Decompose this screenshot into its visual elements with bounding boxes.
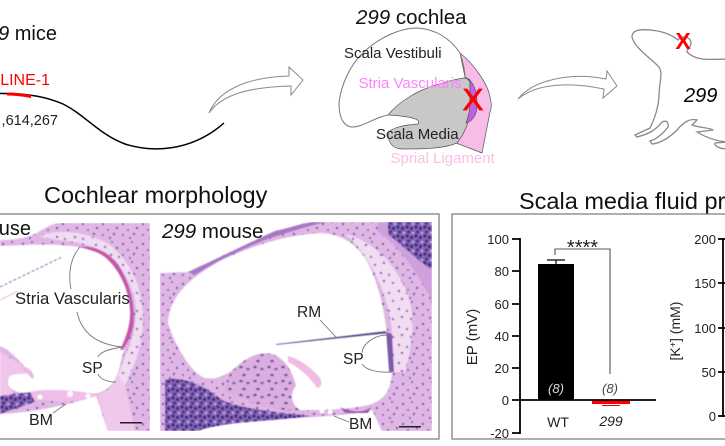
label: Stria Vascularis: Stria Vascularis (358, 75, 462, 92)
label: Scala Media: Scala Media (376, 126, 459, 143)
pale ligament band (345, 234, 412, 372)
label: SP: SP (82, 360, 103, 377)
Reissner's membrane (276, 331, 386, 345)
tissue (0, 223, 150, 431)
top bony wall edge (188, 222, 326, 275)
mouse outline (632, 28, 725, 149)
label: Stria Vascularis: Stria Vascularis (15, 289, 130, 308)
significance stars: **** (567, 237, 598, 259)
stria remnant (386, 332, 394, 372)
bar chart: K+ (667, 232, 725, 424)
y tick labels (694, 232, 716, 424)
label: LINE-1: LINE-1 (0, 72, 50, 89)
y tick labels: 0 (709, 409, 716, 424)
Reissner's membrane (0, 257, 62, 287)
scala vestibuli outline (339, 28, 465, 127)
dark marrow bottom left (165, 379, 310, 431)
red X on ear: X (675, 28, 691, 54)
bar chart: EP: 299 (598, 413, 623, 429)
tissue (160, 222, 432, 431)
heading: cochlear morphology: Cochlear morphology (44, 182, 268, 208)
y tick labels: 150 (694, 276, 716, 291)
WT bar (538, 264, 574, 400)
label: BM: BM (349, 416, 372, 433)
outer bone band (378, 222, 432, 300)
heading: 299 cochlea: 299 cochlea (355, 6, 467, 29)
basilar membrane (30, 390, 97, 402)
stria vascularis (466, 78, 477, 123)
y tick labels: 200 (694, 232, 716, 247)
y axis (718, 238, 725, 417)
y tick labels: 100 (487, 232, 509, 247)
y axis (512, 238, 520, 434)
y tick labels: 0 (502, 393, 509, 408)
genomic position: ,614,267 (2, 113, 58, 129)
y tick labels: 50 (702, 365, 716, 380)
y axis title: EP (mV) (464, 309, 481, 365)
y axis title: [K (667, 347, 683, 360)
label: Spiral Ligament: Sprial Ligament (390, 150, 496, 167)
y tick labels: -20 (490, 426, 509, 441)
significance bracket (555, 249, 610, 374)
y tick labels: 60 (495, 297, 509, 312)
leader lines (320, 320, 392, 422)
spiral ligament (456, 53, 491, 153)
LINE-1 segment (7, 94, 31, 96)
histology: wild-type mouse (0, 218, 150, 431)
y axis title: + (668, 342, 678, 347)
cochlea diagram (339, 28, 496, 167)
panel: cochlear morphology (0, 214, 439, 439)
y axis title: ] (mM) (667, 302, 683, 342)
y tick labels: 20 (495, 361, 509, 376)
limbus (0, 352, 32, 396)
y tick labels (487, 232, 509, 441)
scale bar (120, 422, 142, 424)
label: SP: SP (343, 351, 364, 368)
y tick labels: 100 (694, 321, 716, 336)
dark marrow top right (388, 222, 432, 270)
bar chart: EP: (8) (602, 381, 618, 396)
y tick labels: 40 (495, 329, 509, 344)
stria vascularis tissue (78, 247, 134, 350)
tectorial tip (20, 366, 34, 379)
leader lines (53, 247, 123, 413)
red X on stria: X (463, 82, 484, 117)
label: BM: BM (29, 412, 53, 429)
gene diagram: LINE-1 insertion (0, 72, 224, 149)
tectorial membrane (288, 356, 321, 388)
bar chart: EP (464, 232, 656, 441)
n labels: (8) (548, 381, 564, 396)
scale bar (399, 426, 421, 428)
299 bar (592, 400, 630, 404)
299 error bar (602, 404, 620, 406)
basilar membrane (340, 406, 372, 413)
lumen (0, 245, 132, 394)
arrow: cochlea to mouse (518, 71, 617, 99)
lumen (168, 233, 392, 410)
y tick labels: 80 (495, 264, 509, 279)
label: Scala Vestibuli: Scala Vestibuli (344, 45, 442, 62)
label: 299: 299 (683, 85, 717, 107)
WT error bar (547, 260, 565, 264)
heading: scala media fluid properties: Scala media fluid pr (519, 188, 725, 214)
genome curve (0, 93, 224, 149)
arrow: gene to cochlea (209, 67, 303, 113)
label: RM: RM (297, 304, 321, 321)
label: 299 mouse: 299 mouse (161, 220, 263, 243)
histology: 299 mouse (160, 220, 432, 433)
category labels: WT (547, 414, 569, 430)
scala media (388, 78, 470, 149)
zero baseline (520, 399, 656, 401)
panel: scala media fluid properties (452, 214, 725, 441)
spiral limbus hump (225, 353, 300, 410)
